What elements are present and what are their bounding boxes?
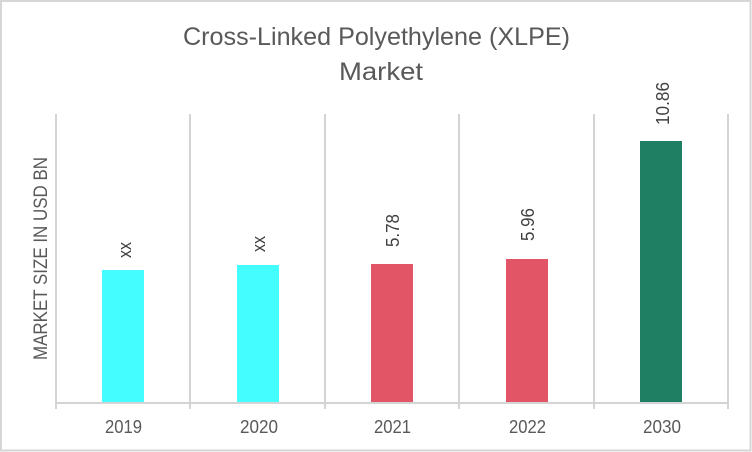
bar: 2030: [640, 82, 682, 437]
bar: 2021: [371, 214, 413, 437]
bar: 2020: 2020: [240, 417, 278, 437]
bar: 2022: 5.96: [518, 208, 538, 241]
bar: 2019: [102, 242, 144, 437]
title: Cross-Linked Polyethylene (XLPE): [183, 23, 570, 51]
bar: 2020: xx: [249, 236, 269, 252]
bar: 2019: xx: [115, 242, 135, 258]
title: [183, 23, 570, 86]
title: Market: [339, 58, 423, 86]
bar chart: [102, 82, 682, 437]
bar: 2022: 2022: [509, 417, 546, 437]
y-axis label: MARKET SIZE IN USD BN: [31, 157, 52, 360]
bar: 2021: 2021: [374, 417, 411, 437]
bar: 2021: 5.78: [383, 214, 403, 247]
bar: 2019: 2019: [105, 417, 142, 437]
bar: 2030: 2030: [643, 417, 681, 437]
bar: 2030: 10.86: [653, 82, 673, 125]
bar: 2022: [506, 208, 548, 437]
bar: 2020: [237, 236, 279, 437]
